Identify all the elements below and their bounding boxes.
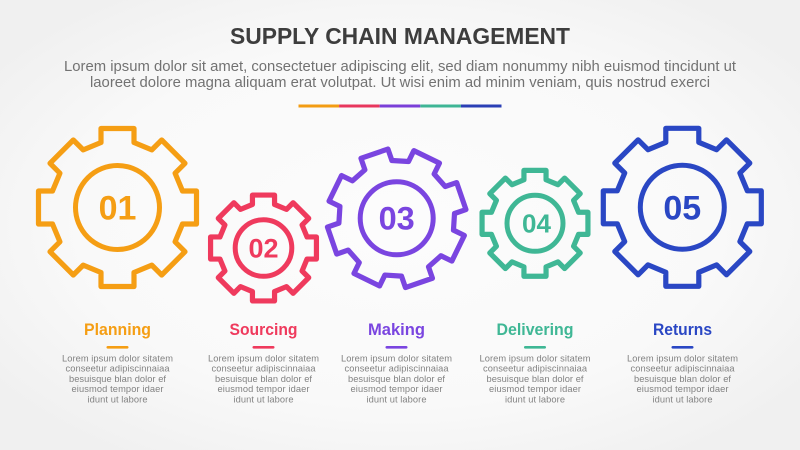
step: Planning [62,321,173,404]
gear 04: 04 [522,208,551,238]
intro text: Lorem ipsum dolor sit amet, consectetuer adipiscing elit, sed diam nonummy nibh euismod tincidunt ut [64,59,736,75]
step: Sourcing: eiusmod tempor idaer [218,384,310,394]
gear 05: 05 [663,189,701,227]
step: Sourcing: besuisque blan dolor ef [215,374,312,384]
step: Returns: idunt ut labore [652,394,712,404]
step: Delivering: Lorem ipsum dolor sitatem [480,354,591,364]
step: Delivering [480,321,591,404]
step: Planning: besuisque blan dolor ef [69,374,166,384]
step: Delivering: Delivering [496,321,574,339]
step: Making: conseetur adipiscinnaiaa [344,364,449,374]
step: Planning: eiusmod tempor idaer [72,384,164,394]
step: Sourcing: Sourcing [230,321,298,339]
gear 02 [211,195,316,301]
step: Sourcing: conseetur adipiscinnaiaa [212,364,316,374]
step: Delivering: eiusmod tempor idaer [489,384,581,394]
step: Making: besuisque blan dolor ef [348,374,445,384]
step: Making: idunt ut labore [366,394,426,404]
step: Returns: besuisque blan dolor ef [634,374,731,384]
step: Making: eiusmod tempor idaer [350,384,442,394]
step: Planning: conseetur adipiscinnaiaa [66,364,170,374]
multicolour divider [298,104,502,108]
intro text: laoreet dolore magna aliquam erat volutpat. Ut wisi enim ad minim veniam, quis nostrud exerci [90,75,710,91]
step: Making: Making [368,321,425,339]
gear 02: 02 [248,234,279,264]
step: Sourcing: idunt ut labore [234,394,294,404]
step: Returns [627,321,738,404]
gear 04 [482,170,588,276]
step: Planning: Lorem ipsum dolor sitatem [62,354,173,364]
step: Making: Lorem ipsum dolor sitatem [341,354,452,364]
step: Delivering: besuisque blan dolor ef [486,374,584,384]
intro text [64,59,736,91]
title: SUPPLY CHAIN MANAGEMENT [230,23,571,49]
gear 01 [38,128,196,286]
step: Delivering: conseetur adipiscinnaiaa [483,364,588,374]
step: Sourcing: Lorem ipsum dolor sitatem [208,354,319,364]
step: Planning: idunt ut labore [88,394,148,404]
step: Returns: conseetur adipiscinnaiaa [630,364,735,374]
gear 03 [310,131,484,305]
gear 03: 03 [379,201,415,237]
gear 05 [603,128,761,286]
step: Returns: Lorem ipsum dolor sitatem [627,354,738,364]
step: Making [341,321,452,404]
gear 01: 01 [99,190,136,228]
step: Delivering: idunt ut labore [505,394,565,404]
step: Returns: Returns [653,321,712,339]
step: Sourcing [208,321,319,404]
step: Returns: eiusmod tempor idaer [636,384,728,394]
step: Planning: Planning [84,321,151,339]
